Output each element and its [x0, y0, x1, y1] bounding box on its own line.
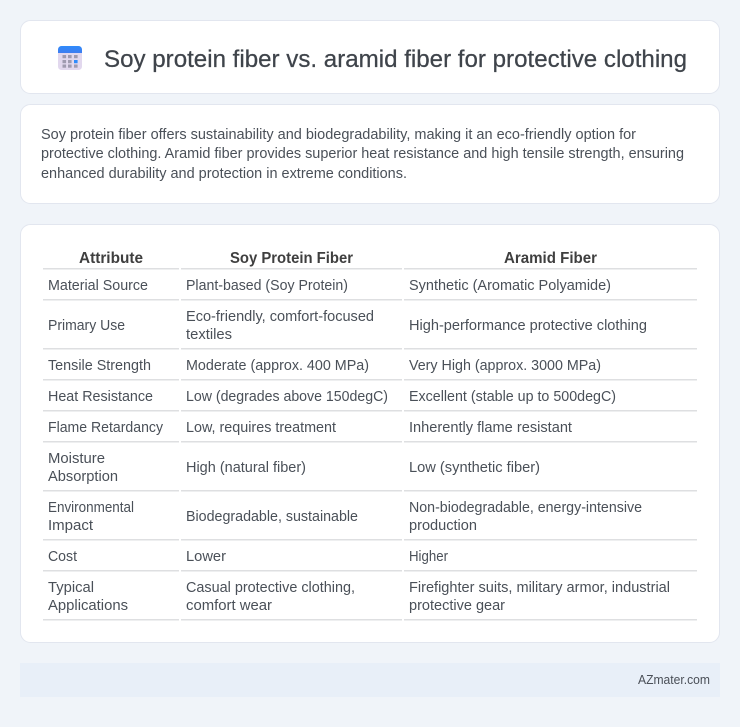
panel: title card	[20, 20, 720, 94]
table header: Attribute	[79, 250, 143, 267]
row: flame retardancy	[48, 420, 572, 436]
row: primary use	[48, 309, 647, 343]
row: typical applications	[48, 580, 670, 614]
row: typical applications: Casual protective clothing,	[186, 580, 355, 596]
row: heat resistance	[48, 389, 616, 405]
row: flame retardancy: Flame Retardancy	[48, 420, 164, 436]
row: heat resistance: Low (degrades above 150degC)	[186, 389, 388, 405]
row: moisture absorption: Low (synthetic fiber)	[409, 460, 540, 476]
row: environmental impact	[48, 500, 642, 534]
row: environmental impact: production	[409, 518, 477, 534]
panel: comparison table	[20, 224, 720, 642]
row: heat resistance: Heat Resistance	[48, 389, 153, 405]
row: cost: Higher	[409, 549, 448, 565]
summary text: Soy protein fiber offers sustainability and biodegradability, making it an eco-friendly option for	[41, 127, 636, 143]
row: moisture absorption: Absorption	[48, 469, 118, 485]
panel: summary card	[20, 104, 720, 204]
table header: Aramid Fiber	[504, 250, 597, 267]
summary text: protective clothing. Aramid fiber provides superior heat resistance and high tensile strength, ensuring	[41, 146, 684, 162]
table header	[79, 250, 597, 267]
row: primary use: Eco-friendly, comfort-focused	[186, 309, 374, 325]
row: tensile strength: Moderate (approx. 400 MPa)	[186, 358, 369, 374]
row: heat resistance: Excellent (stable up to 500degC)	[409, 389, 616, 405]
icon: calendar	[58, 46, 82, 70]
summary text: enhanced durability and protection in extreme conditions.	[41, 166, 407, 182]
row: flame retardancy: Low, requires treatment	[186, 420, 336, 436]
row: cost	[48, 549, 448, 565]
row: environmental impact: Biodegradable, sustainable	[186, 509, 358, 525]
row: typical applications: Applications	[48, 598, 128, 614]
row: material source: Synthetic (Aromatic Polyamide)	[409, 278, 611, 294]
summary text	[41, 127, 684, 182]
title: Soy protein fiber vs. aramid fiber for protective clothing	[104, 46, 687, 73]
row: typical applications: Firefighter suits, military armor, industrial	[409, 580, 670, 596]
row: typical applications: protective gear	[409, 598, 505, 614]
row: material source: Material Source	[48, 278, 148, 294]
row: typical applications: comfort wear	[186, 598, 272, 614]
row: environmental impact: Environmental	[48, 500, 134, 516]
row: cost: Cost	[48, 549, 77, 565]
footer bar: AZmater.com	[638, 673, 710, 687]
row: moisture absorption: Moisture	[48, 451, 105, 467]
row: cost: Lower	[186, 549, 226, 565]
row: tensile strength	[48, 358, 601, 374]
row: primary use: High-performance protective clothing	[409, 318, 647, 334]
row: tensile strength: Tensile Strength	[48, 358, 151, 374]
row: moisture absorption: High (natural fiber)	[186, 460, 306, 476]
row: environmental impact: Impact	[48, 518, 93, 534]
row: primary use: Primary Use	[48, 318, 125, 334]
row: primary use: textiles	[186, 327, 232, 343]
row: typical applications: Typical	[48, 580, 94, 596]
table header: Soy Protein Fiber	[230, 250, 353, 267]
row: environmental impact: Non-biodegradable, energy-intensive	[409, 500, 642, 516]
row: moisture absorption	[48, 451, 540, 485]
footer bar	[20, 663, 720, 697]
row: material source	[48, 278, 611, 294]
row: material source: Plant-based (Soy Protein)	[186, 278, 348, 294]
row: tensile strength: Very High (approx. 3000 MPa)	[409, 358, 601, 374]
row: flame retardancy: Inherently flame resistant	[409, 420, 572, 436]
